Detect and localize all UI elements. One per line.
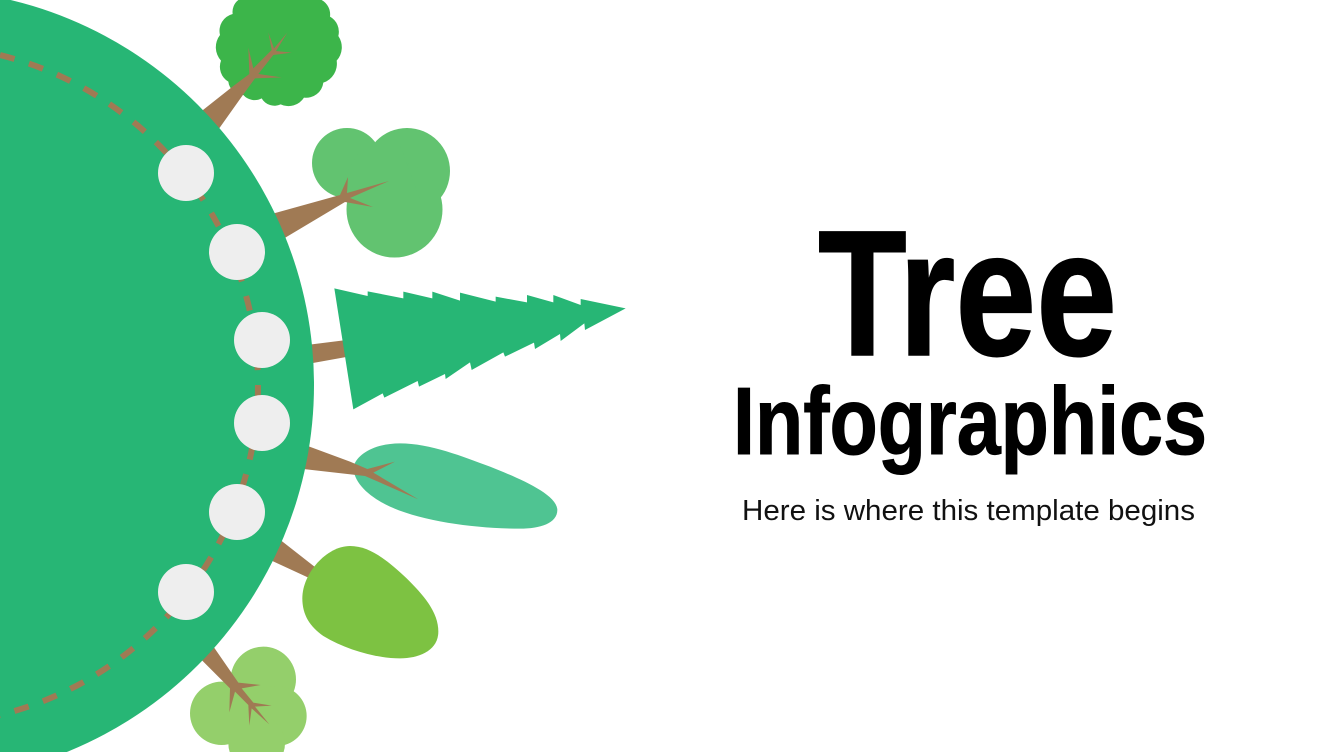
tree 5: rounded lime bbox=[267, 538, 438, 658]
main planet circle bbox=[0, 0, 314, 752]
tree 3: conifer bbox=[307, 288, 626, 409]
tree 1: scalloped dark green bbox=[197, 0, 342, 137]
subtitle: Here is where this template begins bbox=[742, 495, 1195, 527]
title: Tree: Tree bbox=[818, 193, 1117, 393]
tree 6: clover pale green bbox=[190, 642, 307, 752]
title: Infographics: Infographics bbox=[733, 368, 1207, 475]
tree 4: long leaf bbox=[300, 443, 557, 529]
dashed path bbox=[0, 45, 258, 725]
tree 2: clover light green bbox=[268, 128, 450, 258]
timeline dots bbox=[158, 145, 290, 620]
